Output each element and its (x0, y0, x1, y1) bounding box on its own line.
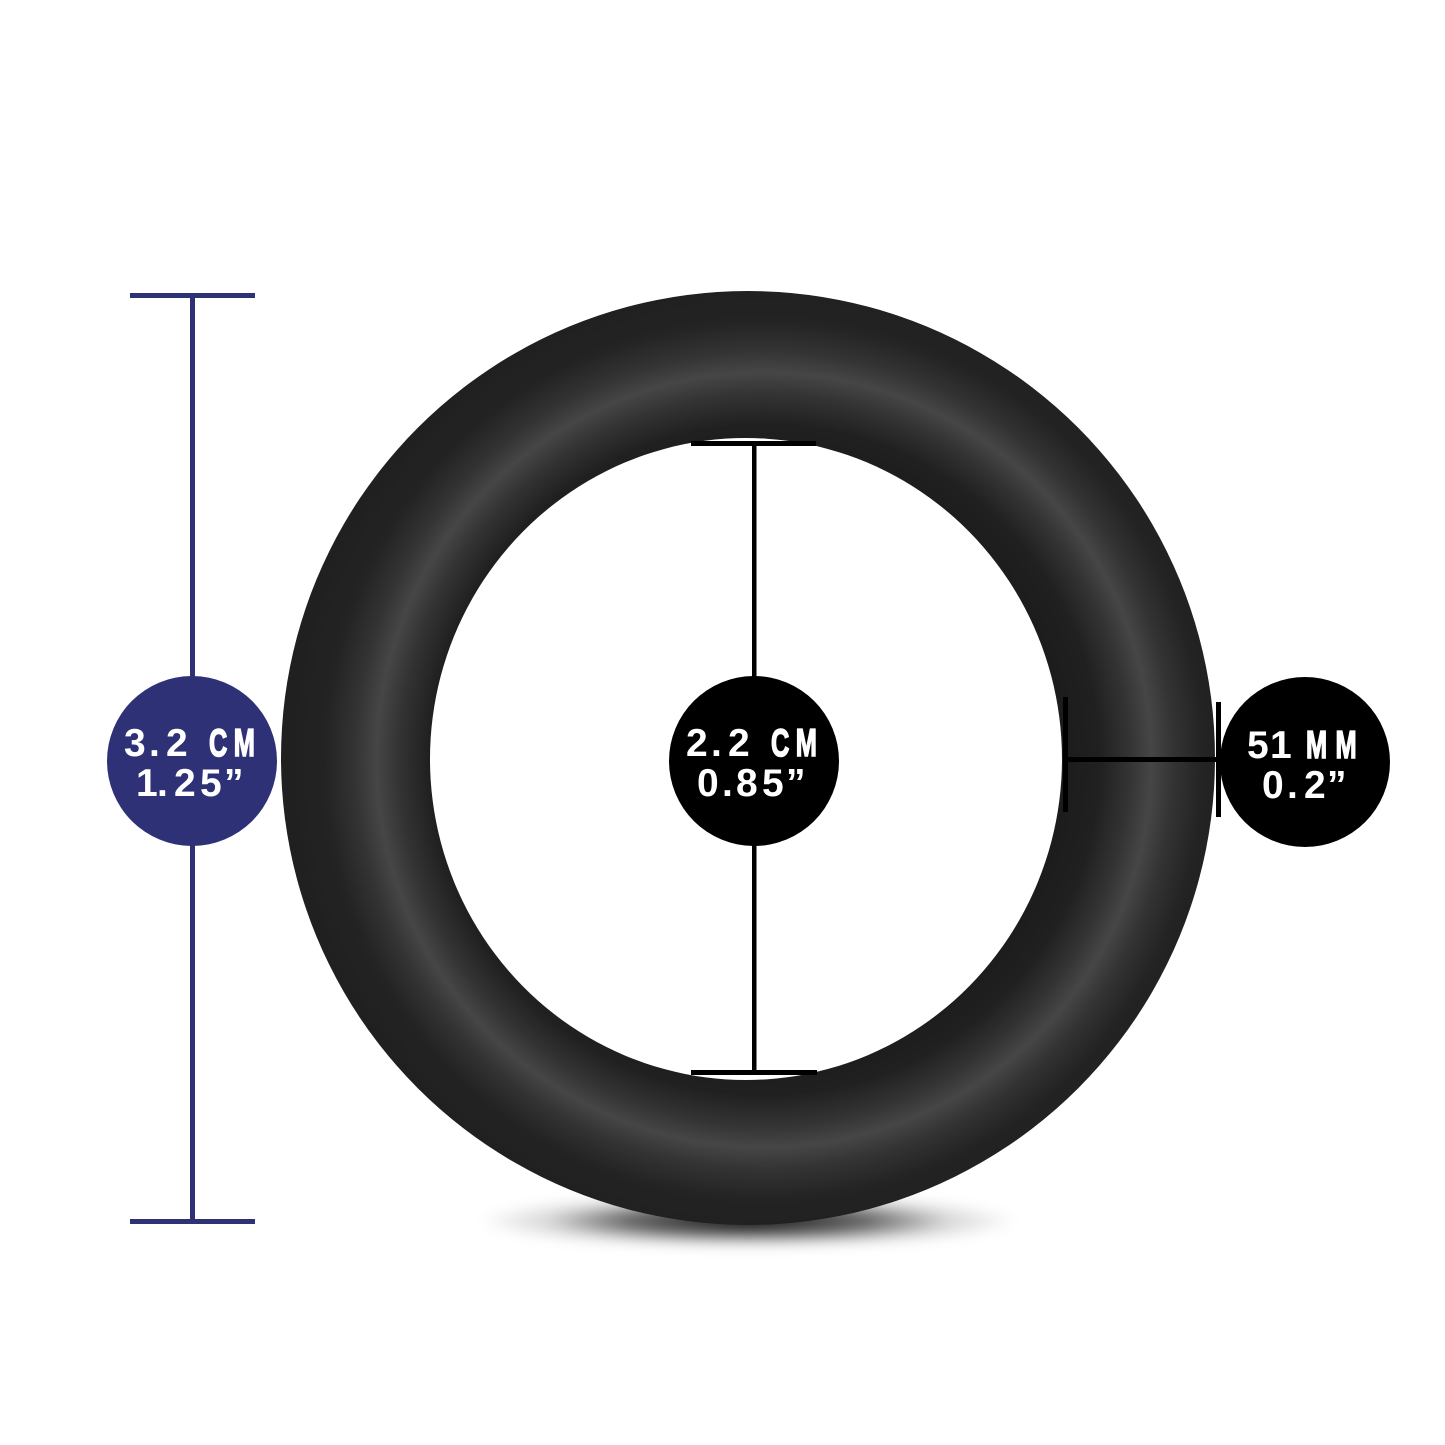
badge: thickness: 0.2” (1262, 764, 1346, 807)
badge: inner diameter (669, 676, 839, 846)
badge: outer diameter: CM (209, 720, 261, 764)
badge: outer diameter: 3.2 (124, 722, 188, 765)
badge: thickness: 51 (1247, 724, 1292, 767)
black rubber ring (281, 291, 1215, 1225)
inner diameter measure (691, 441, 817, 1075)
ground shadow (478, 1193, 1018, 1249)
thickness measure (1063, 697, 1221, 817)
height measure (130, 293, 255, 1224)
badge: outer diameter: 1.25” (136, 762, 244, 805)
badge: thickness: MM (1306, 722, 1365, 766)
badge: inner diameter: CM (771, 720, 823, 764)
badge: thickness (1220, 677, 1390, 847)
badge: inner diameter: 0.85” (697, 762, 806, 805)
badge: outer diameter (107, 676, 277, 846)
badge: inner diameter: 2.2 (686, 722, 750, 765)
